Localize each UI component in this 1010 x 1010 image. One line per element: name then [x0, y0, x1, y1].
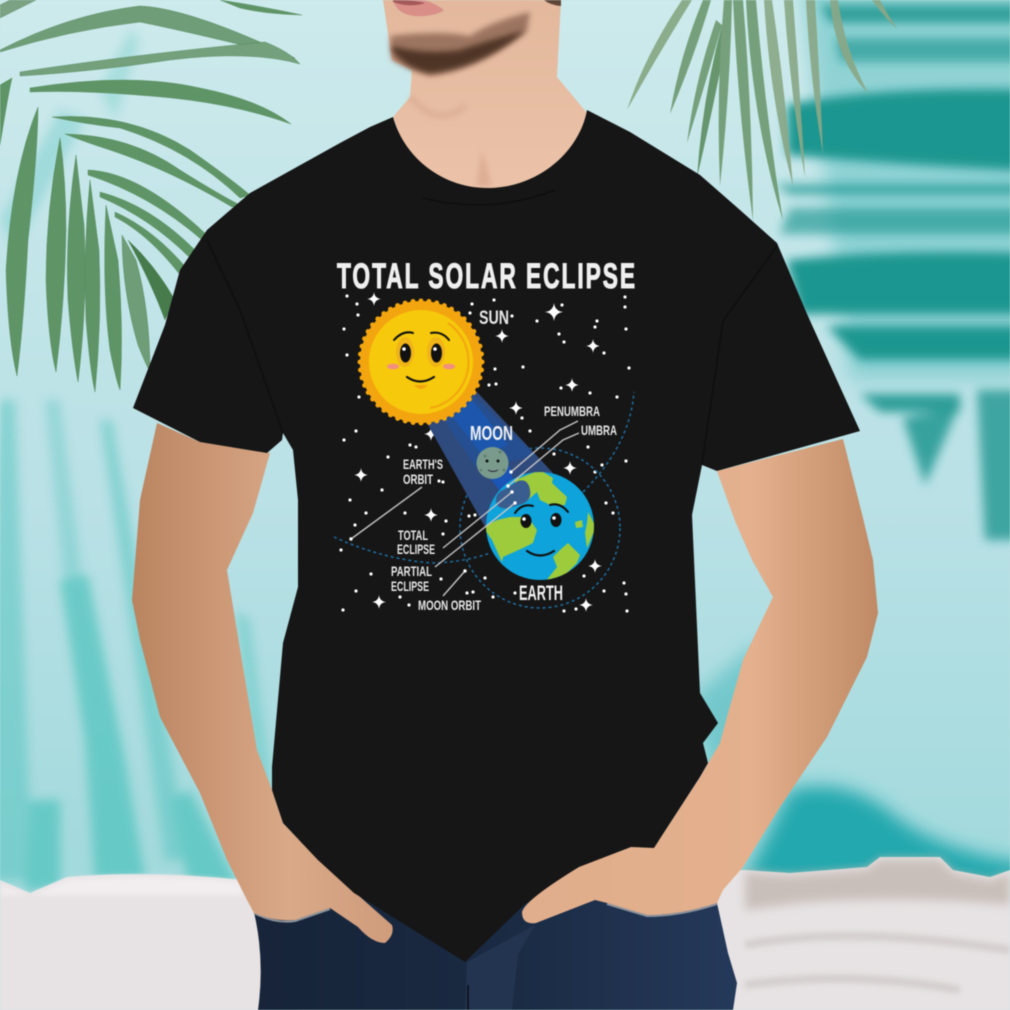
moon: [476, 447, 508, 479]
shadow beam: umbra: [444, 396, 535, 498]
shadow beam: penumbra: [428, 392, 553, 535]
label: partial eclipse: [391, 563, 432, 594]
star field: [341, 292, 629, 612]
label: earth's orbit: [403, 456, 443, 487]
label: total eclipse: [397, 527, 435, 557]
label: earth's orbit: ORBIT: [403, 471, 433, 487]
person: left arm and hand: [132, 423, 393, 943]
orbit: Earth's orbit: [334, 392, 634, 563]
person: right arm and hand: [522, 439, 878, 923]
title: TOTAL SOLAR ECLIPSE: [337, 257, 637, 296]
earth: [483, 470, 596, 582]
label: sun: SUN: [479, 308, 509, 329]
palm leaves right: [627, 0, 897, 221]
orbit: moon orbit: [460, 448, 620, 608]
label: total eclipse: TOTAL: [398, 527, 428, 543]
palm leaves left: [0, 0, 302, 392]
t-shirt: [133, 110, 860, 962]
sun face: [387, 332, 455, 389]
label: umbra: UMBRA: [581, 422, 617, 438]
label: partial eclipse: PARTIAL: [391, 563, 432, 579]
umbra shadow on earth: [496, 480, 530, 508]
label: moon orbit: MOON ORBIT: [418, 597, 481, 613]
background: sand: [0, 857, 1010, 1010]
person: jeans: [254, 840, 737, 1010]
small star dots on leader line ends: [351, 472, 515, 571]
sun: [360, 301, 482, 423]
label: total eclipse: ECLIPSE: [397, 541, 435, 557]
teal band above the sand, right: [740, 786, 1010, 895]
label: penumbra: PENUMBRA: [544, 403, 600, 419]
label: earth: EARTH: [519, 582, 563, 605]
label: partial eclipse: ECLIPSE: [391, 578, 429, 594]
leader lines: [351, 421, 579, 596]
label: earth's orbit: EARTH'S: [403, 456, 443, 472]
label: moon: MOON: [470, 423, 513, 445]
person: neck and chin: [383, 0, 587, 195]
